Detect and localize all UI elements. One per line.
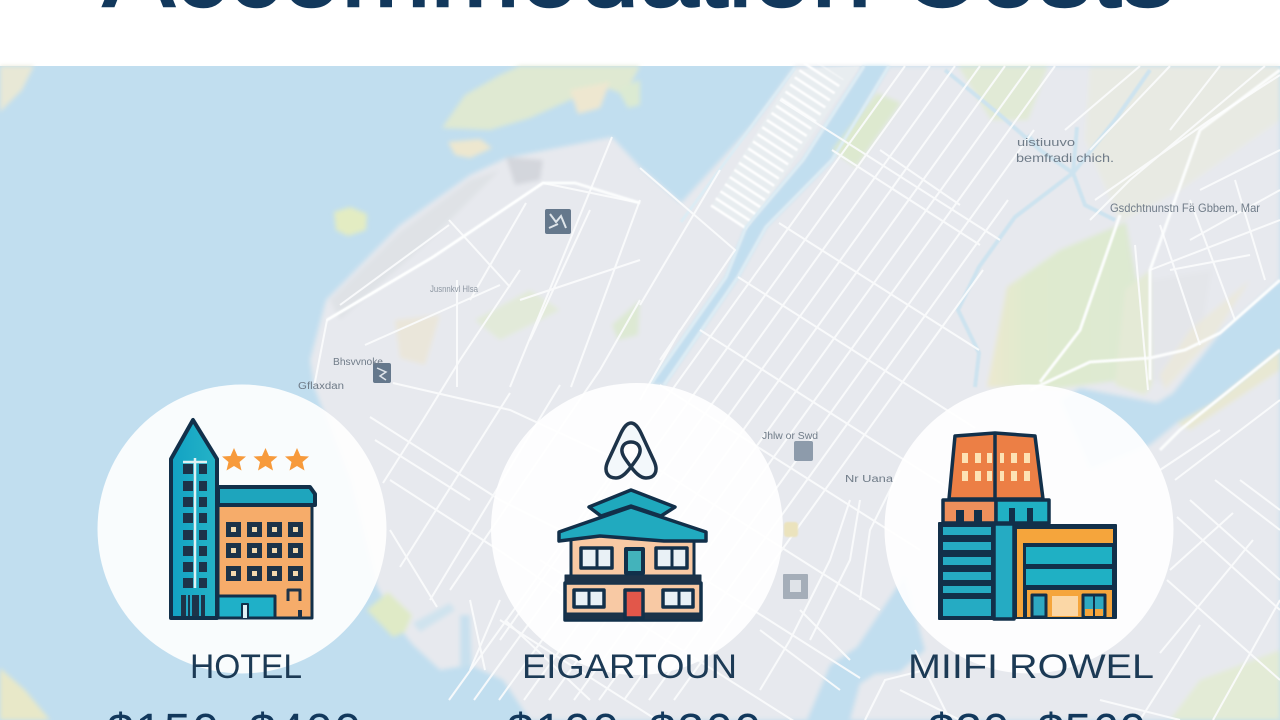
- map: lower river: [807, 575, 925, 720]
- map: street labels: Gsdchtnunstn Fä Gbbem, Mar: [1110, 201, 1260, 215]
- map: white road grid: [314, 66, 1280, 720]
- panel: vacation rental option: [491, 383, 783, 720]
- icon: upper roof: [589, 490, 675, 516]
- icon: ground-floor doors: [1032, 595, 1046, 617]
- hotel circle: [98, 384, 386, 674]
- map: light blue stream: [945, 70, 1150, 387]
- map: north-west islands: [442, 66, 640, 130]
- hotel label: HOTEL: [190, 648, 302, 686]
- third label: MIIFI ROWEL: [908, 648, 1154, 686]
- icon: main roof: [559, 507, 706, 541]
- rental circle: [491, 383, 783, 675]
- map: east water: [1060, 280, 1280, 470]
- panel: mixed-use hostel option: [884, 384, 1174, 720]
- map: street labels: Jusnnkvl Hlsa: [430, 284, 478, 294]
- icon: hotel building: [171, 420, 315, 618]
- icon: three stars: [222, 448, 309, 470]
- icon: two-storey house: [559, 490, 706, 620]
- map: main thick roads: [327, 70, 1280, 450]
- icon: tower: [171, 420, 217, 618]
- map: street labels: Nr Uana: [845, 474, 894, 485]
- avenues east of the upper river: [449, 66, 1055, 700]
- icon: red door: [625, 590, 643, 618]
- map: street labels: Jhlw or Swd: [762, 431, 818, 442]
- map: main land mass: [310, 66, 1280, 720]
- map: inlet by the second circle: [460, 615, 472, 668]
- panel: hotel option: [98, 384, 386, 720]
- map: eastern park: [987, 222, 1146, 388]
- map: street labels: [298, 137, 1260, 485]
- third circle: [884, 384, 1174, 674]
- icon: upper windows and door: [581, 548, 612, 568]
- icon: centre column: [994, 524, 1014, 619]
- icon: left striped block: [939, 523, 999, 619]
- icon: hotel roof: [218, 487, 315, 505]
- icon: tower and podium building: [939, 433, 1116, 619]
- icon: lower floor: [565, 583, 701, 620]
- icon: right block: [1014, 525, 1116, 618]
- peninsula streets: [314, 137, 640, 387]
- icon: upper floor: [571, 534, 694, 580]
- map: pale green north blocks: [832, 93, 901, 167]
- icon: hotel entrance: [218, 596, 275, 618]
- map: transit markers: [373, 209, 813, 599]
- map: street labels: Bhsvvnoke: [333, 357, 383, 368]
- white title band background: [0, 0, 1280, 66]
- map: peninsula tints: [506, 157, 543, 185]
- eastern neighbourhoods: [1065, 66, 1280, 240]
- icon: rental logo: [606, 423, 656, 478]
- icon: hotel body: [218, 505, 312, 618]
- map: street labels: bemfradi chich.: [1016, 151, 1114, 165]
- lower middle roads: [760, 470, 900, 690]
- cross streets: [500, 150, 980, 720]
- map: street labels: uistiuuvo: [1017, 137, 1075, 149]
- map: upper river: [650, 66, 889, 385]
- west of river, above circle: [640, 168, 735, 400]
- rental label: EIGARTOUN: [522, 648, 737, 686]
- icon: mid band: [943, 500, 996, 523]
- icon: orange top block: [949, 433, 1043, 499]
- map: striped pier: [711, 66, 860, 230]
- map: street labels: Gflaxdan: [298, 381, 344, 392]
- map: river outlines: [650, 66, 889, 385]
